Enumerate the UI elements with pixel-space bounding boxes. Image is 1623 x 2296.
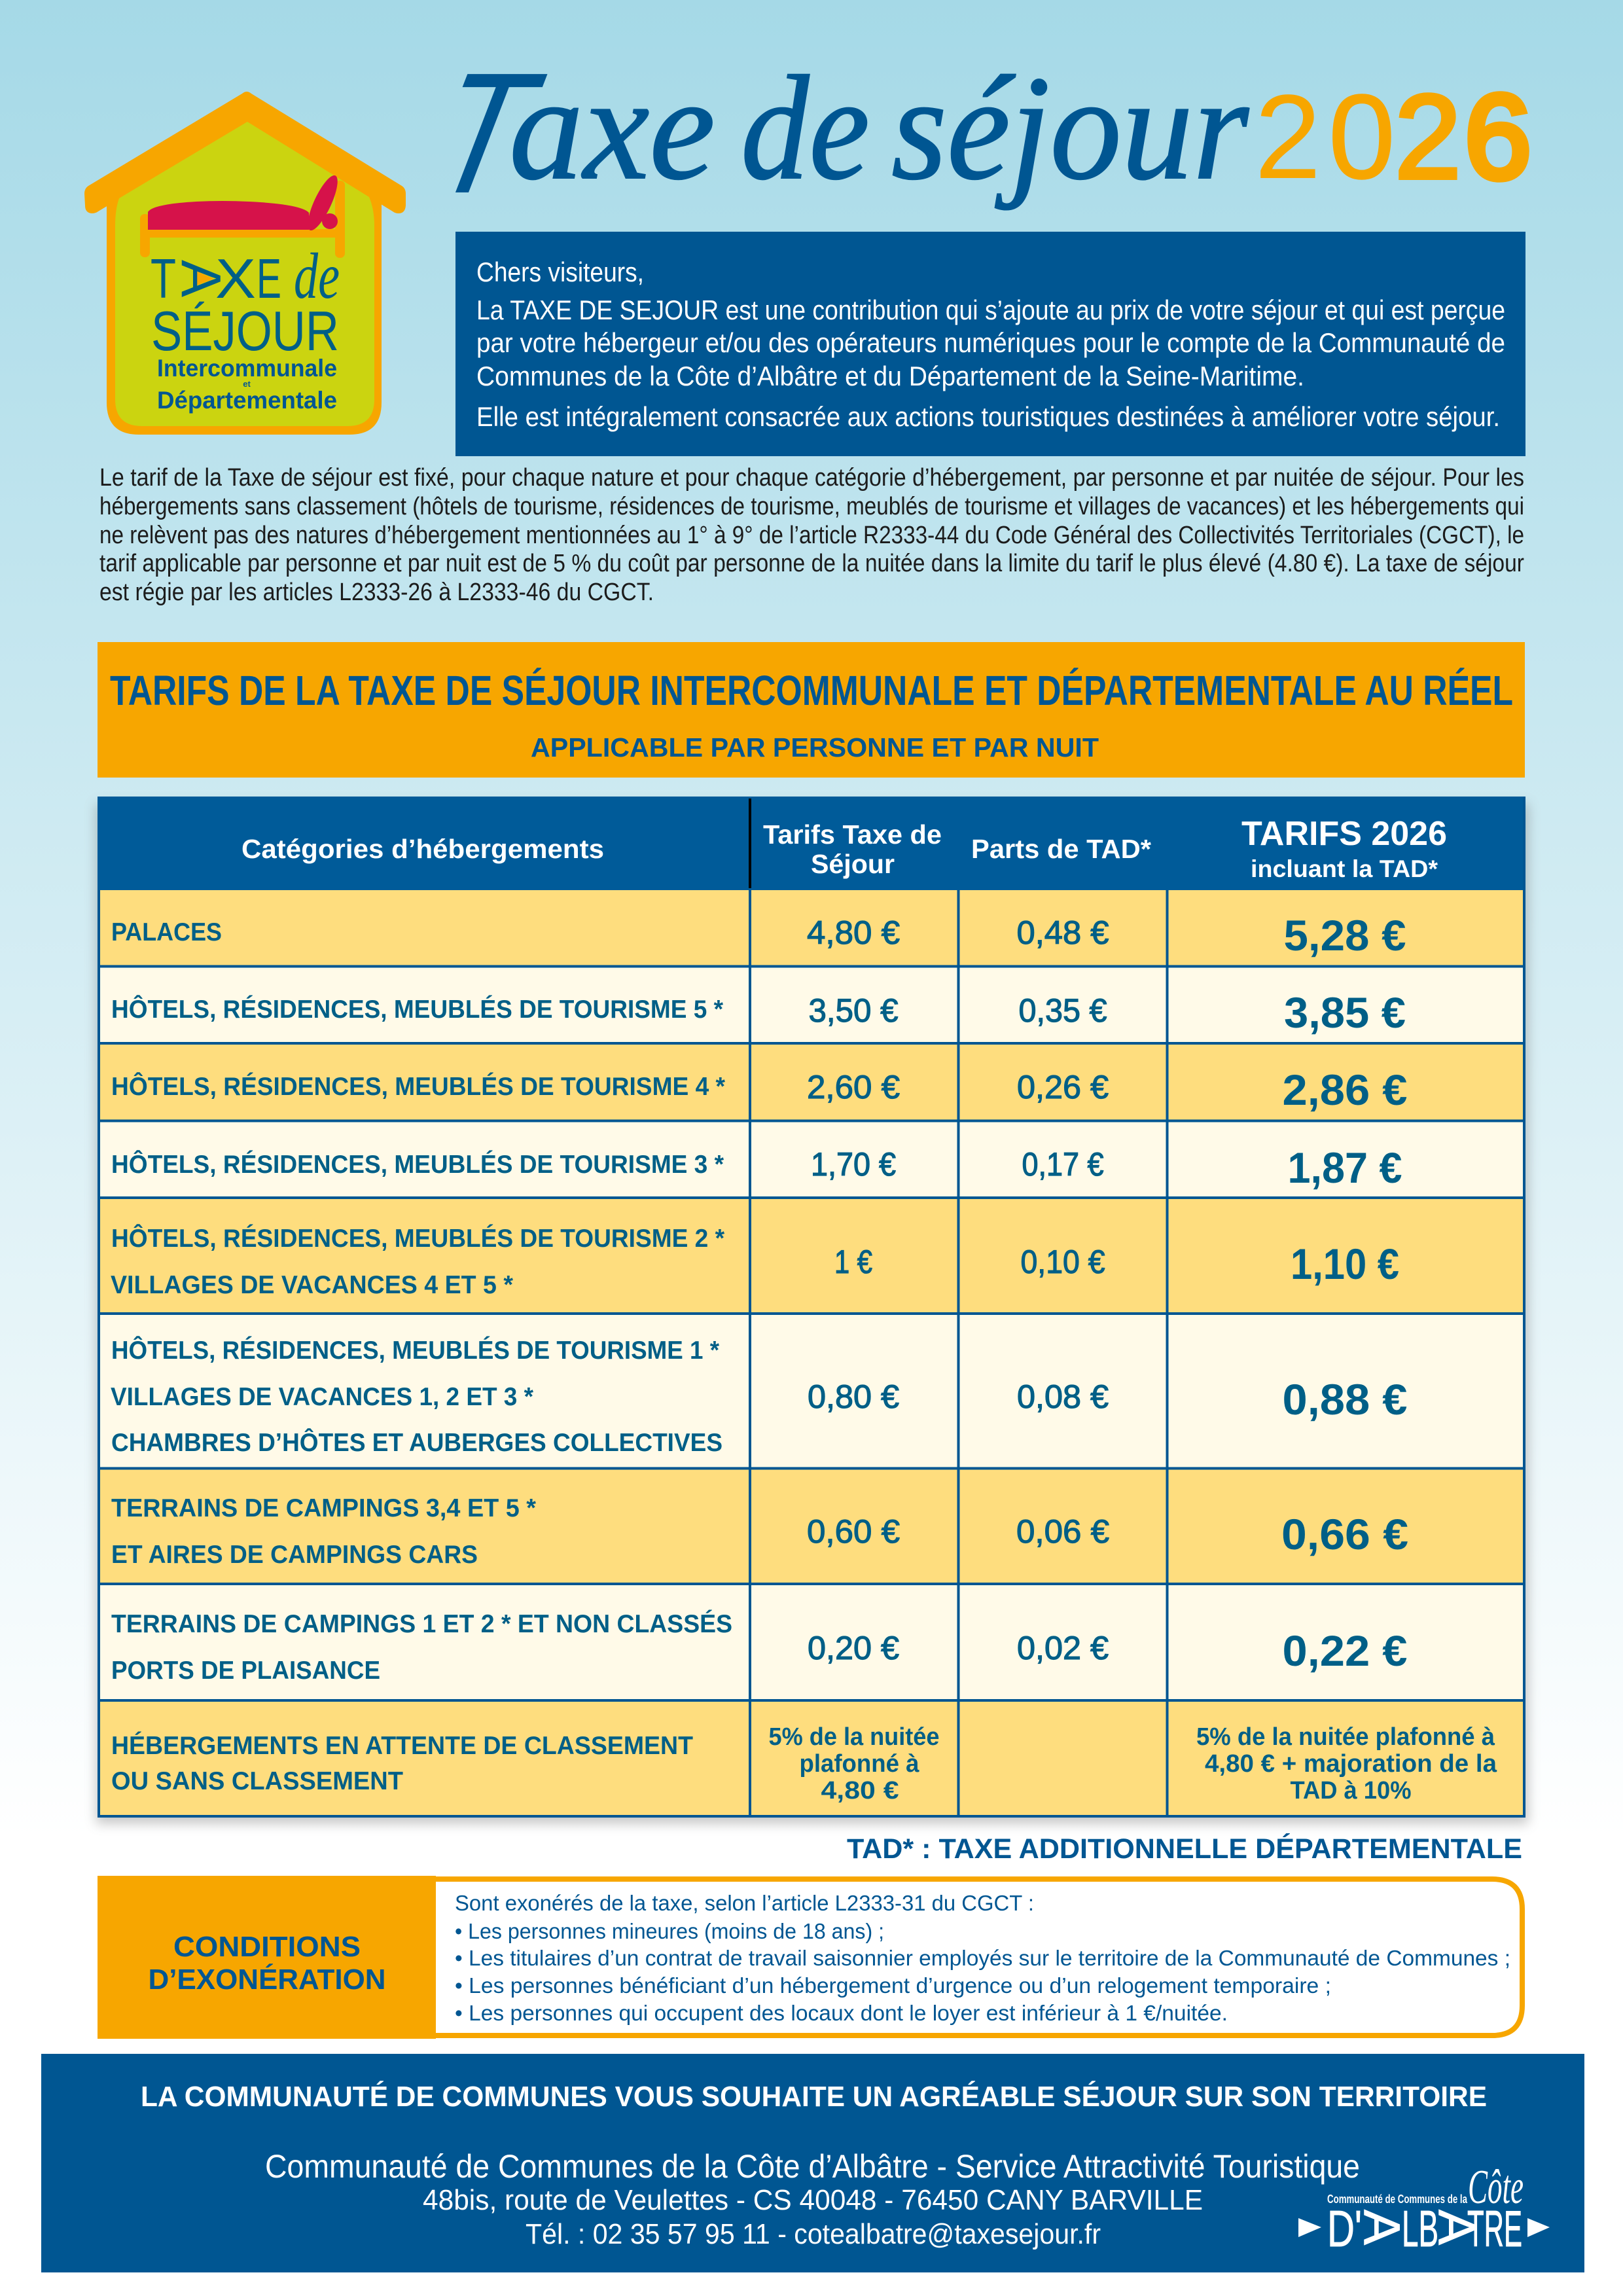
- row: campings 1 and 2 star: 0,22 €: [1283, 1626, 1407, 1675]
- row: campings 3 to 5 star: 0,60 €: [807, 1513, 900, 1550]
- row: campings 3 to 5 star: 0,06 €: [1016, 1513, 1109, 1550]
- panel: table heading banner: APPLICABLE PAR PERSONNE ET PAR NUIT: [531, 732, 1099, 762]
- logo wordmark: SÉJOUR: [151, 300, 339, 363]
- row: palaces: 0,48 €: [1017, 914, 1109, 951]
- panel: footer: Communauté de Communes de la Côte d’Albâtre - Service Attractivité Touristique: [265, 2148, 1360, 2185]
- row: unclassified: HÉBERGEMENTS EN ATTENTE DE CLASSEMENT: [111, 1731, 693, 1760]
- logo: Côte d'Albâtre: [1298, 2161, 1550, 2257]
- panel: exemption conditions: [98, 1876, 1522, 2039]
- panel: welcome message: [455, 232, 1525, 456]
- row: campings 1 and 2 star: [111, 1609, 1407, 1685]
- row: unclassified: 4,80 € + majoration de la: [1205, 1750, 1497, 1778]
- row: campings 1 and 2 star: 0,20 €: [808, 1630, 899, 1666]
- title: Taxe de séjour 2026: 6: [1465, 69, 1531, 204]
- exemption list: • Les personnes mineures (moins de 18 ans) ;: [455, 1919, 884, 1943]
- row: 3 star: HÔTELS, RÉSIDENCES, MEUBLÉS DE TOURISME 3 *: [111, 1149, 724, 1179]
- row: 5 star: 0,35 €: [1018, 992, 1107, 1029]
- logo: Côte d'Albâtre: A: [1428, 2210, 1486, 2245]
- row: unclassified: plafonné à: [800, 1750, 919, 1778]
- row: 3 star: 1,70 €: [811, 1146, 896, 1183]
- exemption list: • Les personnes qui occupent des locaux dont le loyer est inférieur à 1 €/nuitée.: [455, 2001, 1228, 2025]
- row: 4 star: 2,86 €: [1283, 1066, 1407, 1114]
- logo: Côte d'Albâtre: A: [1353, 2210, 1411, 2245]
- row: campings 3 to 5 star: TERRAINS DE CAMPINGS 3,4 ET 5 *: [111, 1494, 537, 1522]
- row: unclassified: 4,80 €: [821, 1777, 899, 1804]
- exemption list: [455, 1891, 1510, 2025]
- title: Taxe de séjour 2026: 0: [1329, 69, 1395, 204]
- exemption list: Sont exonérés de la taxe, selon l’article L2333-31 du CGCT :: [455, 1891, 1034, 1915]
- logo wordmark: E: [257, 248, 281, 310]
- table header: Tarifs Taxe de: [763, 819, 942, 850]
- row: 4 star: [111, 1066, 1407, 1114]
- row backgrounds: [99, 890, 1524, 1816]
- row: 1 star: 0,80 €: [808, 1378, 899, 1415]
- logo: taxe de séjour house: [84, 92, 406, 435]
- row: palaces: PALACES: [111, 918, 222, 946]
- panel: exemption conditions: D’EXONÉRATION: [148, 1963, 386, 1996]
- logo wordmark: Départementale: [157, 387, 337, 414]
- row: unclassified: [111, 1723, 1497, 1804]
- row: 1 star: [111, 1335, 1407, 1457]
- row: 2 star: VILLAGES DE VACANCES 4 ET 5 *: [111, 1271, 514, 1299]
- panel: table heading banner: [98, 642, 1525, 778]
- row: 4 star: HÔTELS, RÉSIDENCES, MEUBLÉS DE TOURISME 4 *: [111, 1071, 726, 1101]
- row: campings 3 to 5 star: [111, 1494, 1408, 1569]
- row: 5 star: 3,85 €: [1284, 988, 1406, 1037]
- row: unclassified: OU SANS CLASSEMENT: [111, 1767, 403, 1795]
- row: 4 star: 0,26 €: [1017, 1069, 1109, 1105]
- row: 1 star: 0,08 €: [1017, 1378, 1109, 1415]
- row: 2 star: 1 €: [834, 1244, 872, 1280]
- row: campings 1 and 2 star: TERRAINS DE CAMPINGS 1 ET 2 * ET NON CLASSÉS: [111, 1609, 732, 1638]
- table header: [98, 797, 1525, 890]
- text block: legal explanation: [99, 464, 1524, 606]
- logo wordmark: [151, 240, 340, 414]
- row: 1 star: HÔTELS, RÉSIDENCES, MEUBLÉS DE TOURISME 1 *: [111, 1335, 720, 1365]
- table header: TARIFS 2026: [1241, 815, 1447, 853]
- logo wordmark: et: [243, 379, 251, 389]
- row: 2 star: 0,10 €: [1021, 1244, 1105, 1280]
- table header: incluant la TAD*: [1251, 855, 1438, 882]
- row: 1 star: 0,88 €: [1283, 1375, 1407, 1424]
- icon: bed: [140, 172, 345, 258]
- row: 2 star: HÔTELS, RÉSIDENCES, MEUBLÉS DE TOURISME 2 *: [111, 1223, 725, 1253]
- logo: Côte d'Albâtre: LB: [1402, 2200, 1438, 2257]
- row: campings 3 to 5 star: 0,66 €: [1281, 1510, 1408, 1558]
- row: 5 star: 3,50 €: [809, 992, 899, 1029]
- table header: Catégories d’hébergements: [241, 834, 604, 864]
- row: 3 star: [111, 1143, 1402, 1192]
- logo wordmark: X: [215, 248, 256, 310]
- logo: Côte d'Albâtre: D': [1327, 2200, 1362, 2257]
- row: 4 star: 2,60 €: [807, 1069, 900, 1105]
- row: unclassified: TAD à 10%: [1291, 1777, 1411, 1804]
- logo: Côte d'Albâtre: TRE: [1467, 2200, 1522, 2257]
- row: palaces: [111, 911, 1406, 960]
- logo: Côte d'Albâtre: Côte: [1468, 2161, 1524, 2214]
- logo: Côte d'Albâtre: Communauté de Communes de la: [1327, 2193, 1468, 2206]
- title: Taxe de séjour 2026: 2: [1255, 69, 1321, 204]
- row: 3 star: 0,17 €: [1022, 1146, 1104, 1183]
- row: campings 1 and 2 star: 0,02 €: [1017, 1630, 1109, 1666]
- text block: legal explanation: est régie par les articles L2333-26 à L2333-46 du CGCT.: [99, 579, 654, 606]
- table header: Séjour: [811, 849, 895, 879]
- panel: exemption conditions: CONDITIONS: [173, 1931, 361, 1963]
- title: Taxe de séjour 2026: axe: [509, 46, 715, 211]
- panel: footer: 48bis, route de Veulettes - CS 40048 - 76450 CANY BARVILLE: [423, 2184, 1203, 2216]
- exemption list: • Les personnes bénéficiant d’un hébergement d’urgence ou d’un relogement temporaire ;: [455, 1973, 1331, 1998]
- row: 1 star: CHAMBRES D’HÔTES ET AUBERGES COLLECTIVES: [111, 1427, 722, 1457]
- exemption list: • Les titulaires d’un contrat de travail saisonnier employés sur le territoire de la Communauté de Communes ;: [455, 1946, 1510, 1970]
- panel: welcome message: Elle est intégralement consacrée aux actions touristiques destinées à améliorer votre séjour.: [476, 401, 1500, 432]
- title: Taxe de séjour 2026: [405, 37, 1531, 229]
- panel: footer: Tél. : 02 35 57 95 11 - cotealbatre@taxesejour.fr: [526, 2218, 1101, 2250]
- logo wordmark: de: [294, 240, 340, 312]
- row: palaces: 5,28 €: [1284, 911, 1406, 960]
- title: Taxe de séjour 2026: de: [741, 46, 870, 211]
- row: 1 star: VILLAGES DE VACANCES 1, 2 ET 3 *: [111, 1383, 534, 1411]
- row: palaces: 4,80 €: [807, 914, 900, 951]
- panel: footer: LA COMMUNAUTÉ DE COMMUNES VOUS SOUHAITE UN AGRÉABLE SÉJOUR SUR SON TERRITOIRE: [141, 2080, 1487, 2113]
- footnote: TAD definition: TAD* : TAXE ADDITIONNELLE DÉPARTEMENTALE: [847, 1833, 1522, 1865]
- row: unclassified: 5% de la nuitée: [768, 1723, 940, 1751]
- title: Taxe de séjour 2026: T: [405, 37, 565, 229]
- table header: Parts de TAD*: [971, 834, 1151, 864]
- row: 5 star: [111, 988, 1406, 1037]
- row: campings 3 to 5 star: ET AIRES DE CAMPINGS CARS: [111, 1541, 478, 1569]
- panel: welcome message: La TAXE DE SEJOUR est une contribution qui s’ajoute au prix de votre séjour et qui est perçue: [476, 295, 1505, 325]
- row: 5 star: HÔTELS, RÉSIDENCES, MEUBLÉS DE TOURISME 5 *: [111, 994, 724, 1024]
- panel: welcome message: par votre hébergeur et/ou des opérateurs numériques pour le compte de la Communauté de: [476, 327, 1505, 358]
- row: campings 1 and 2 star: PORTS DE PLAISANCE: [111, 1657, 380, 1685]
- row: unclassified: 5% de la nuitée plafonné à: [1196, 1723, 1495, 1751]
- title: Taxe de séjour 2026: 2: [1395, 69, 1461, 204]
- panel: welcome message: Chers visiteurs,: [476, 257, 644, 287]
- row: 2 star: [111, 1223, 1399, 1299]
- panel: welcome message: Communes de la Côte d’Albâtre et du Département de la Seine-Maritime.: [476, 361, 1304, 391]
- logo wordmark: Intercommunale: [157, 355, 337, 382]
- table shadow: [96, 804, 1528, 1823]
- table: tariffs: [98, 797, 1525, 1816]
- row: 2 star: 1,10 €: [1291, 1240, 1399, 1288]
- logo wordmark: T: [151, 248, 176, 310]
- row: 3 star: 1,87 €: [1288, 1143, 1402, 1192]
- panel: footer: [41, 2054, 1584, 2272]
- logo wordmark: A: [169, 260, 232, 297]
- title: Taxe de séjour 2026: séjour: [891, 46, 1249, 211]
